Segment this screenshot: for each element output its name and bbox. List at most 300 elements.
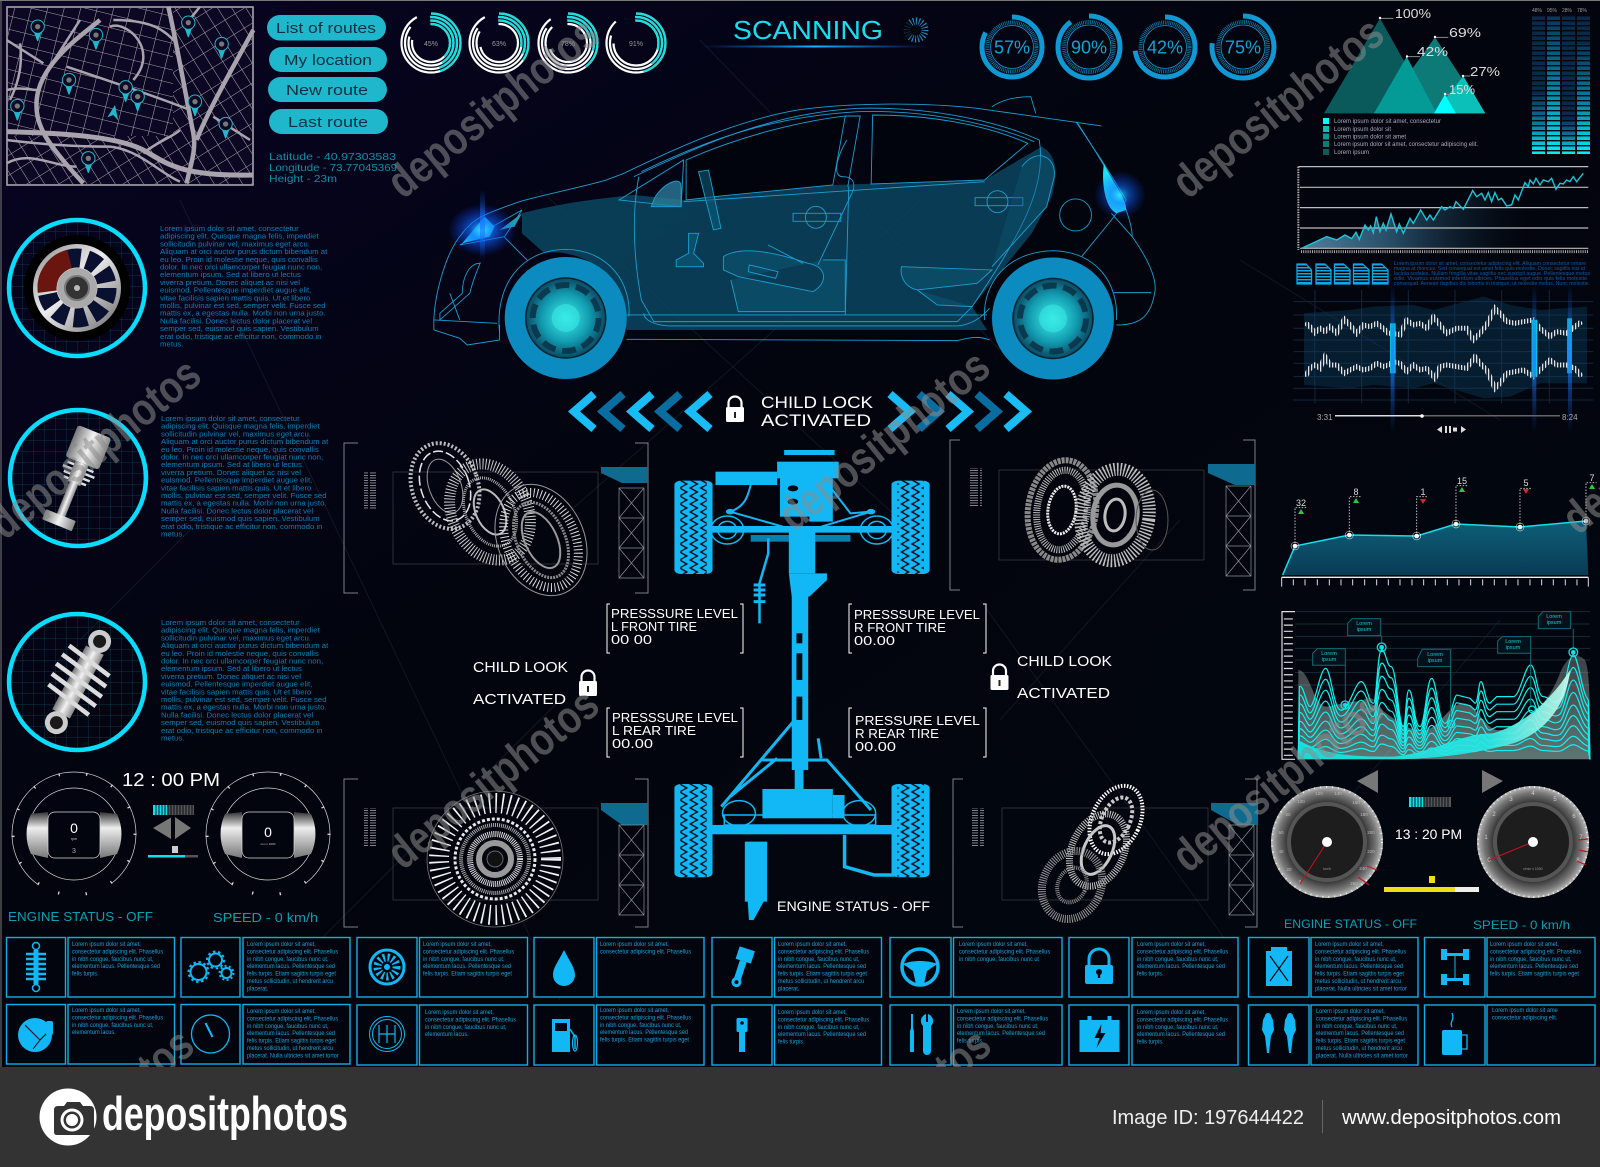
R front tire	[849, 604, 986, 653]
level bars	[1530, 8, 1592, 154]
document text: odio. Vivamus euismod interdum ultrices. Phasellus eget odio quis felis molestie	[1394, 276, 1587, 282]
shock absorber circle	[9, 614, 145, 750]
cell: coffee cup: Lorem ipsum dolor sit ame	[1492, 1008, 1558, 1014]
cell: key: Lorem ipsum dolor sit amet,	[778, 1010, 847, 1016]
tachometer: 6	[1572, 814, 1576, 820]
image id: Image ID: 197644422	[1112, 1107, 1304, 1129]
cell: spring	[6, 938, 174, 997]
trend area chart: 8	[1353, 487, 1359, 497]
child lock banner: CHILD LOCK	[761, 393, 874, 412]
cell: fuel pump: consectetur adipiscing elit. Phasellus	[600, 1015, 691, 1022]
speedometer: 60	[1278, 830, 1284, 835]
cell: padlock: in nibh congue, faucibus nunc ut,	[1137, 957, 1219, 963]
L rear tire: L REAR TIRE	[612, 723, 696, 738]
triangle chart: 100%	[1395, 6, 1431, 21]
cell: gears: elementum lacus. Pellentesque sed	[247, 964, 335, 970]
wheel text: adipiscing elit. Quisque magna felis, imperdiet	[160, 232, 320, 241]
tachometer: 8	[1576, 858, 1580, 864]
piston text: elementum ipsum. Sed at libero ut lectus	[161, 460, 302, 469]
gear panel frames	[344, 440, 1257, 927]
cell: fuel can: felis turpis. Etiam sagittis turpis eget	[1315, 971, 1404, 978]
level bars: 28%	[1562, 8, 1573, 14]
right chevrons	[890, 394, 1026, 429]
cell: gear shift: in nibh congue, faucibus nunc ut,	[425, 1025, 507, 1031]
arrows	[1357, 770, 1503, 793]
trend area chart	[1282, 473, 1597, 587]
cell: spark plugs: placerat. Nulla ultricies sit amet tortor	[1316, 1053, 1408, 1060]
audio timeline: 8:24	[1562, 413, 1578, 422]
cell: battery: felis turpis.	[1137, 1039, 1164, 1046]
document icons	[1297, 264, 1388, 284]
speedometer: 0	[1299, 879, 1302, 884]
cell: gauge: placerat. Nulla ultricies sit amet tortor	[247, 1053, 339, 1060]
shock absorber text: eu leo. Proin id molestie neque, quis convallis	[161, 649, 319, 658]
cell: piston	[712, 938, 882, 997]
center indicators	[148, 804, 198, 858]
shock absorber text: adipiscing elit. Quisque magna felis, imperdiet	[161, 626, 321, 635]
gear drawing bottom right	[1031, 777, 1153, 929]
audio waveform	[1293, 283, 1593, 433]
cell: battery: elementum lacus. Pellentesque sed	[1137, 1032, 1225, 1038]
cell: turbine: felis turpis. Etiam sagittis turpis eget	[423, 971, 512, 978]
cell: piston: consectetur adipiscing elit. Phasellus	[778, 949, 869, 956]
donut 91%	[606, 14, 666, 72]
triangle legend: Lorem ipsum dolor sit amet	[1334, 134, 1406, 140]
cell: drop: Lorem ipsum dolor sit amet,	[600, 942, 669, 948]
cell: chassis: in nibh congue, faucibus nunc ut,	[1490, 957, 1572, 963]
watermarks: depositphotos	[768, 339, 999, 541]
cell: padlock: Lorem ipsum dolor sit amet,	[1137, 942, 1206, 948]
car blueprint	[434, 97, 1155, 380]
left dashboard: SPEED - 0 km/h	[213, 911, 318, 925]
pressure readouts	[607, 604, 986, 757]
triangle legend: Lorem ipsum	[1334, 150, 1369, 156]
cell: tools: consectetur adipiscing elit. Phasellus	[957, 1016, 1048, 1023]
cell: chassis: Lorem ipsum dolor sit amet,	[1490, 942, 1559, 948]
triangle chart: 42%	[1417, 44, 1449, 59]
scanning title	[700, 15, 930, 48]
triangle legend: Lorem ipsum dolor sit amet, consectetur adipiscing elit.	[1334, 142, 1478, 148]
cell: gauge: consectetur adipiscing elit. Phasellus	[247, 1016, 338, 1023]
child lock banner	[574, 393, 1026, 430]
blue percent rings	[982, 16, 1274, 78]
triangle chart: 27%	[1470, 64, 1500, 79]
route buttons: List of routes	[276, 20, 376, 37]
left outline gauge: 0	[70, 820, 78, 836]
tachometer: 2	[1492, 812, 1496, 818]
piston text: Aliquam at orci auctor purus dictum bibendum at	[161, 437, 329, 446]
callout boxes	[1313, 612, 1571, 667]
piston text: eu leo. Proin id molestie neque, quis convallis	[161, 445, 319, 454]
trend area chart: 15	[1457, 476, 1467, 486]
shock absorber text: mollis, pulvinar est sed, semper velit. Fusce sed	[161, 695, 327, 704]
cell: fuel pump: elementum lacus. Pellentesque sed	[600, 1030, 688, 1036]
wave chart: Lorem	[1505, 639, 1521, 645]
R front tire: 00.00	[854, 633, 895, 648]
cell: fuel can: placerat. Nulla ultricies sit amet tortor	[1315, 986, 1407, 993]
cell: spark plugs: elementum lacus. Pellentesque sed	[1316, 1031, 1404, 1037]
cell: spring: Lorem ipsum dolor sit amet,	[72, 942, 141, 948]
speedometer: km/h	[1323, 867, 1331, 871]
growth line chart	[1298, 167, 1588, 252]
steering rod	[759, 538, 768, 623]
cell: fuel can	[1248, 938, 1418, 997]
cell: spring: consectetur adipiscing elit. Phasellus	[72, 949, 163, 956]
cell: gears: felis turpis. Etiam sagittis turpis eget	[247, 971, 336, 978]
cell: fuel can: consectetur adipiscing elit. Phasellus	[1315, 949, 1406, 956]
donut 78%	[538, 14, 598, 72]
ring 57%: 57%	[994, 38, 1030, 58]
cell: chassis	[1424, 938, 1595, 997]
cell: padlock: felis turpis.	[1137, 971, 1164, 978]
piston text: mollis, pulvinar est sed, semper velit. Fusce sed	[161, 491, 327, 500]
cell: key	[712, 1005, 882, 1065]
cell: steering wheel: consectetur adipiscing elit. Phasellus	[959, 949, 1050, 956]
ring 75%	[1212, 16, 1274, 78]
child lock banner: ACTIVATED	[761, 411, 871, 430]
cell: padlock	[1069, 938, 1238, 997]
wheel text: semper sed, euismod quis sapien. Vestibulum	[160, 324, 319, 333]
R rear tire: PRESSURE LEVEL	[855, 713, 980, 728]
wave chart: ipsum	[1506, 645, 1521, 651]
document text: magna at rhoncus. Sed consequat est amet felis quis molestie. Donec sagittis nisi at	[1394, 266, 1586, 272]
cell: battery	[1069, 1005, 1238, 1065]
cell: padlock: elementum lacus. Pellentesque sed	[1137, 964, 1225, 970]
trend area chart: 32	[1296, 498, 1306, 508]
tachometer: r/min x 1000	[1523, 867, 1543, 871]
cell: drop	[534, 938, 704, 997]
L front tire: L FRONT TIRE	[611, 619, 697, 634]
child look right: CHILD LOOK	[1017, 653, 1112, 670]
cell: spring: elementum lacus. Pellentesque sed	[72, 964, 160, 970]
cell: spring: felis turpis.	[72, 971, 99, 978]
cell: turbine: Lorem ipsum dolor sit amet,	[423, 942, 492, 948]
cell: turbine	[357, 938, 528, 997]
L front tire: PRESSSURE LEVEL	[611, 606, 738, 621]
cell: tools: in nibh congue, faucibus nunc ut,	[957, 1024, 1039, 1030]
piston text: adipiscing elit. Quisque magna felis, imperdiet	[161, 422, 321, 431]
shock absorber text: sollicitudin pulvinar vel, maximus eget arcu.	[161, 634, 311, 642]
cell: spring: in nibh congue, faucibus nunc ut,	[72, 957, 154, 963]
cell: tools	[890, 1005, 1062, 1065]
cell: padlock: consectetur adipiscing elit. Phasellus	[1137, 949, 1228, 956]
trend area chart: 5	[1523, 478, 1529, 488]
cell: battery: in nibh congue, faucibus nunc ut,	[1137, 1025, 1219, 1031]
cell: fuel can: Lorem ipsum dolor sit amet,	[1315, 942, 1384, 948]
cell: gear shift: Lorem ipsum dolor sit amet,	[425, 1010, 494, 1016]
piston circle	[10, 410, 146, 546]
info grid row 2	[6, 1004, 1595, 1065]
right dashboard: SPEED - 0 km/h	[1473, 918, 1570, 932]
ring 75%: 75%	[1225, 38, 1261, 58]
map pins	[11, 16, 232, 173]
ring 42%: 42%	[1147, 38, 1183, 58]
L front tire: 00 00	[611, 632, 652, 647]
clock: 13 : 20 PM	[1395, 826, 1462, 842]
piston text: metus.	[161, 530, 184, 538]
wave chart: Lorem	[1356, 621, 1372, 627]
speedometer: 80	[1285, 812, 1291, 817]
left outline gauge: rpm	[71, 837, 77, 841]
triangle legend: Lorem ipsum dolor sit	[1334, 127, 1391, 133]
level bars: 78%	[1577, 8, 1588, 14]
spine	[792, 583, 808, 770]
white donut gauges	[402, 14, 666, 72]
speedometer: 120	[1315, 791, 1323, 796]
front wheel	[505, 257, 627, 379]
cell: battery: consectetur adipiscing elit. Phasellus	[1137, 1017, 1228, 1024]
coordinates text: Latitude - 40.97303583	[269, 152, 397, 163]
wave chart: ipsum	[1428, 658, 1443, 664]
route buttons: My location	[284, 52, 372, 69]
shock absorber text: Nulla facilisi. Donec lectus dolor placerat vel	[161, 711, 313, 719]
lock icon	[726, 396, 744, 422]
coordinates text: Longitude - 73.77045369	[269, 163, 397, 174]
shock absorber text: euismod. Pellentesque imperdiet augue elit,	[161, 680, 312, 689]
L rear tire: 00.00	[612, 736, 653, 751]
cell: turbine: consectetur adipiscing elit. Phasellus	[423, 949, 514, 956]
cell: spark plugs: felis turpis. Etiam sagittis turpis eget	[1316, 1038, 1405, 1045]
right dashboard	[1271, 770, 1589, 932]
cell: spark plugs	[1248, 1005, 1418, 1065]
wheel text: sollicitudin pulvinar vel, maximus eget arcu.	[160, 240, 310, 248]
R front tire: R FRONT TIRE	[854, 620, 946, 635]
shock absorber text: Lorem ipsum dolor sit amet, consectetur	[161, 618, 300, 627]
cell: fuel pump: in nibh congue, faucibus nunc ut,	[600, 1023, 682, 1029]
speedometer: 200	[1367, 830, 1375, 835]
trend area chart: 7	[1589, 473, 1595, 483]
speedometer: 140	[1334, 791, 1342, 796]
piston text: sollicitudin pulvinar vel, maximus eget arcu.	[161, 430, 311, 438]
wheel text: elementum ipsum. Sed at libero ut lectus	[160, 270, 301, 279]
wheel text: mollis, pulvinar est sed, semper velit. Fusce sed	[160, 301, 326, 310]
cell: gauge: metus sollicitudin, ut hendrerit arcu	[247, 1046, 333, 1052]
cell: key: in nibh congue, faucibus nunc ut,	[778, 1025, 860, 1031]
wave chart: Lorem	[1427, 652, 1443, 658]
audio timeline: 3:31	[1317, 413, 1333, 422]
wheel text: viverra pretium. Donec aliquet ac nisi vel	[160, 278, 300, 287]
map	[7, 7, 253, 185]
cell: gear shift	[357, 1005, 528, 1065]
wheel text: Aliquam at orci auctor purus dictum bibendum at	[160, 247, 328, 256]
status labels: ENGINE STATUS - OFF	[8, 910, 153, 924]
document text	[1394, 261, 1590, 287]
piston text: mattis ex, a egestas nulla. Morbi non urna justo.	[161, 499, 327, 508]
wheel text: mattis ex, a egestas nulla. Morbi non urna justo.	[160, 309, 326, 318]
R rear tire: 00.00	[855, 739, 896, 754]
child look left	[473, 659, 597, 708]
cell: gears: placerat.	[247, 986, 269, 993]
fuel bar	[1384, 876, 1479, 892]
cell: spark plugs: metus sollicitudin, ut hendrerit arcu	[1316, 1046, 1402, 1052]
cell: turbine: in nibh congue, faucibus nunc ut,	[423, 957, 505, 963]
left chevrons	[574, 394, 710, 429]
trend area chart: 1	[1420, 487, 1426, 497]
cell: gear shift: consectetur adipiscing elit. Phasellus	[425, 1017, 516, 1024]
shock absorber text: vitae facilisis sapien mattis quis. Ut et libero	[161, 688, 311, 696]
left outline gauge	[0, 748, 160, 920]
cell: steering wheel: in nibh congue, faucibus nunc ut	[959, 957, 1039, 963]
cell: gear shift: elementum lacus.	[425, 1032, 469, 1038]
cell: brake disc: Lorem ipsum dolor sit amet,	[72, 1008, 141, 1014]
speedometer: 100	[1297, 799, 1305, 804]
cell: gauge: in nibh congue, faucibus nunc ut,	[247, 1024, 329, 1030]
gear drawing bottom left	[427, 791, 563, 927]
wheel text: Lorem ipsum dolor sit amet, consectetur	[160, 224, 299, 233]
coordinates text: Height - 23m	[269, 174, 337, 185]
wheel circle	[9, 220, 145, 356]
coordinates text	[269, 152, 397, 185]
piston text: semper sed, euismod quis sapien. Vestibulum	[161, 514, 320, 523]
cell: key: felis turpis.	[778, 1039, 805, 1046]
speedometer: 240	[1359, 866, 1367, 871]
wheel text: eu leo. Proin id molestie neque, quis convallis	[160, 255, 318, 264]
cell: spark plugs: Lorem ipsum dolor sit amet,	[1316, 1009, 1385, 1015]
cell: steering wheel	[890, 938, 1062, 997]
clock: 12 : 00 PM	[122, 770, 220, 790]
scanning spinner	[898, 18, 925, 44]
cell: fuel can: elementum lacus. Pellentesque sed	[1315, 964, 1403, 970]
child look left: ACTIVATED	[473, 691, 566, 708]
footer logo: depositphotos	[102, 1087, 348, 1140]
shock absorber text: elementum ipsum. Sed at libero ut lectus	[161, 664, 302, 673]
rear frame	[721, 720, 871, 810]
rear wheel	[992, 258, 1114, 380]
cell: brake disc: consectetur adipiscing elit. Phasellus	[72, 1015, 163, 1022]
tachometer	[1477, 786, 1589, 898]
triangle chart: 15%	[1449, 82, 1475, 97]
tail light glow	[1094, 171, 1146, 219]
cell: brake disc: in nibh congue, faucibus nunc ut,	[72, 1023, 154, 1029]
wave chart: Lorem	[1321, 651, 1337, 657]
donut 45%: 45%	[424, 41, 438, 48]
shock absorber text: Aliquam at orci auctor purus dictum bibendum at	[161, 641, 329, 650]
cell: gears: in nibh congue, faucibus nunc ut,	[247, 957, 329, 963]
tachometer: 1	[1484, 835, 1488, 841]
right outline gauge	[182, 748, 354, 920]
cell: tools: felis turpis.	[957, 1038, 984, 1045]
piston text: viverra pretium. Donec aliquet ac nisi vel	[161, 468, 301, 477]
gear drawing top right	[1021, 456, 1168, 565]
right outline gauge: 0	[264, 824, 272, 840]
piston text: euismod. Pellentesque imperdiet augue elit,	[161, 476, 312, 485]
tires	[674, 481, 930, 877]
cell: drop: consectetur adipiscing elit. Phasellus	[600, 949, 691, 956]
ring 90%	[1058, 16, 1120, 78]
wheel text: Nulla facilisi. Donec lectus dolor placerat vel	[160, 317, 312, 325]
cell: gears: metus sollicitudin, ut hendrerit arcu	[247, 979, 333, 985]
engine	[715, 450, 839, 522]
cell: chassis: consectetur adipiscing elit. Phasellus	[1490, 949, 1581, 956]
triangle chart	[1323, 6, 1500, 156]
chassis diagram	[674, 450, 930, 920]
cell: piston: Lorem ipsum dolor sit amet,	[778, 942, 847, 948]
shock absorber text: erat odio, tristique ac efficitur non, commodo in	[161, 726, 323, 735]
child look left: CHILD LOOK	[473, 659, 568, 676]
cell: spark plugs: in nibh congue, faucibus nunc ut,	[1316, 1024, 1398, 1030]
level bars: 48%	[1532, 8, 1543, 14]
cell: steering wheel: Lorem ipsum dolor sit amet,	[959, 942, 1028, 948]
speedometer: 20	[1286, 867, 1292, 872]
watermarks: depositphotos	[377, 677, 608, 879]
wheel text: metus.	[160, 340, 183, 348]
audio timeline	[1317, 413, 1578, 433]
shock absorber text: dolor. In nec orci ullamcorper feugiat nunc non,	[161, 657, 323, 665]
speedometer: 160	[1352, 800, 1360, 805]
wheel text: dolor. In nec orci ullamcorper feugiat nunc non,	[160, 263, 322, 271]
route buttons: Last route	[288, 114, 368, 131]
cell: gauge: elementum lacus. Pellentesque sed	[247, 1031, 335, 1037]
cell: tools: elementum lacus. Pellentesque sed	[957, 1031, 1045, 1037]
level bars: 95%	[1547, 8, 1558, 14]
cell: spark plugs: consectetur adipiscing elit. Phasellus	[1316, 1016, 1407, 1023]
status labels: ENGINE STATUS - OFF	[1284, 917, 1417, 931]
gear drawing top left	[399, 433, 604, 611]
document text: consequat. Aenean dapibus dis lobortis in tristique, ut molestie metus. Nunc molestie.	[1394, 281, 1590, 287]
piston text: Nulla facilisi. Donec lectus dolor placerat vel	[161, 507, 313, 515]
cell: battery: Lorem ipsum dolor sit amet,	[1137, 1010, 1206, 1016]
wave chart: ipsum	[1547, 620, 1562, 626]
piston text: dolor. In nec orci ullamcorper feugiat nunc non,	[161, 453, 323, 461]
document text: Lorem ipsum dolor sit amet, consectetur adipiscing elit. Aliquam consectetur ornare	[1394, 261, 1586, 267]
piston text: vitae facilisis sapien mattis quis. Ut et libero	[161, 484, 311, 492]
donut 63%: 63%	[492, 41, 506, 48]
tachometer: 3	[1509, 797, 1513, 803]
cell: fuel pump	[534, 1005, 704, 1065]
cell: piston: in nibh congue, faucibus nunc ut,	[778, 957, 860, 963]
ring 42%	[1135, 17, 1195, 77]
cell: fuel pump: felis turpis. Etiam sagittis turpis eget	[600, 1037, 689, 1044]
tachometer: 7	[1579, 835, 1583, 841]
R front tire: PRESSSURE LEVEL	[854, 607, 980, 622]
cell: key: consectetur adipiscing elit. Phasellus	[778, 1017, 869, 1024]
R rear tire: R REAR TIRE	[855, 726, 939, 741]
right outline gauge: mm x 1000	[261, 842, 276, 846]
piston text: Lorem ipsum dolor sit amet, consectetur	[161, 414, 300, 423]
wheel text: euismod. Pellentesque imperdiet augue elit,	[160, 286, 311, 295]
shock absorber text: metus.	[161, 734, 184, 742]
cell: coffee cup: consectetur adipiscing elit.	[1492, 1015, 1558, 1022]
scanning title: SCANNING	[733, 15, 883, 45]
wave chart	[1282, 612, 1591, 759]
cell: turbine: elementum lacus. Pellentesque sed	[423, 964, 511, 970]
speedometer: 260	[1350, 881, 1358, 886]
child look right	[990, 653, 1112, 702]
cell: tools: Lorem ipsum dolor sit amet,	[957, 1009, 1026, 1015]
R rear tire	[849, 708, 986, 757]
child look right: ACTIVATED	[1017, 685, 1110, 702]
donut 45%	[402, 14, 460, 72]
engine status center: ENGINE STATUS - OFF	[777, 898, 930, 914]
left outline gauge: 3	[72, 848, 76, 855]
cell: gauge: felis turpis. Etiam sagittis turpis eget	[247, 1038, 336, 1045]
L rear tire	[607, 708, 743, 757]
donut 63%	[470, 14, 528, 72]
tachometer: 5	[1553, 797, 1557, 803]
donut 78%: 78%	[561, 41, 575, 48]
speedometer: 180	[1360, 812, 1368, 817]
triangle legend	[1323, 118, 1478, 156]
speedometer: 40	[1278, 849, 1284, 854]
wheel text: vitae facilisis sapien mattis quis. Ut et libero	[160, 294, 310, 302]
cell: gauge: Lorem ipsum dolor sit amet,	[247, 1009, 316, 1015]
cell: key: elementum lacus. Pellentesque sed	[778, 1032, 866, 1038]
shock absorber text: mattis ex, a egestas nulla. Morbi non urna justo.	[161, 703, 327, 712]
speedometer: 220	[1367, 849, 1375, 854]
cell: chassis: elementum lacus. Pellentesque sed	[1490, 964, 1578, 970]
route buttons: New route	[286, 82, 368, 99]
wave chart: Lorem	[1546, 614, 1562, 620]
